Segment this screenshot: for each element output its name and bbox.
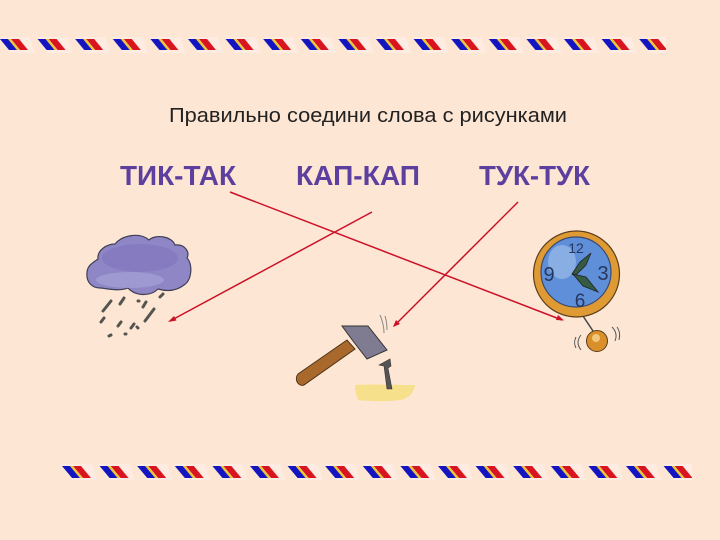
arrow: КАП-КАП to cloud [168, 212, 372, 322]
word: ТУК-ТУК: ТУК-ТУК [479, 160, 591, 191]
icon: pendulum clock [534, 231, 620, 352]
nail base [355, 385, 415, 401]
icon: pendulum clock: 3 [597, 263, 609, 285]
icon: pendulum clock: 6 [575, 291, 585, 312]
motion lines [380, 315, 387, 333]
icon: rain cloud [87, 235, 191, 336]
icon: hammer and nail [296, 315, 415, 401]
arrow: ТИК-ТАК to clock [230, 192, 564, 320]
hammer handle [296, 340, 355, 385]
top decorative border [0, 36, 666, 54]
nail [379, 359, 392, 389]
word: ТИК-ТАК: ТИК-ТАК [120, 160, 237, 191]
arrow: ТУК-ТУК to hammer [393, 202, 518, 327]
icon: pendulum clock: 12 [568, 240, 584, 256]
icon: pendulum clock: 9 [543, 264, 555, 286]
hammer head [342, 326, 387, 359]
word: КАП-КАП: КАП-КАП [296, 160, 420, 191]
bottom decorative border [62, 463, 692, 481]
title: Правильно соедини слова с рисунками [169, 104, 567, 127]
